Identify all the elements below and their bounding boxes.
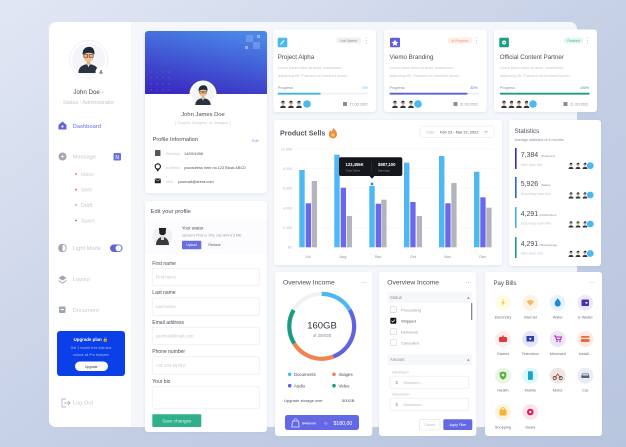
avatar upload block: Your avatar: [182, 226, 204, 230]
form: bio: [152, 379, 259, 409]
nav: document: Document: [73, 308, 99, 314]
bill icon grid: Car: [582, 388, 589, 393]
birthday row: Birthday: [166, 152, 180, 156]
nav: light mode toggle: Light Mode: [73, 246, 101, 252]
minimum input: Minimum: [392, 370, 409, 374]
message submenu: Inbox: [81, 172, 94, 178]
edit link: Edit: [252, 139, 259, 143]
filter more menu: ···: [466, 280, 472, 286]
bill icon grid: Games: [497, 351, 509, 356]
upgrade storage line: 500GB: [342, 398, 355, 403]
bill icon grid: Shopping: [495, 424, 511, 429]
y axis labels: 2,000: [283, 226, 292, 230]
bill icon grid: Deals: [525, 424, 535, 429]
donut legend: Documents: [294, 372, 316, 377]
stat: sales: Secondary team five: [521, 192, 551, 196]
form: email address: [152, 320, 259, 345]
bar chart: [299, 155, 492, 247]
project card: Official Content Partner: 21 Oct 2022: [570, 102, 588, 106]
icon: flame: [329, 128, 337, 138]
nav: light mode toggle: [59, 244, 122, 252]
stat: distribution: [515, 207, 594, 228]
bill icon grid: Motor: [553, 388, 563, 393]
project card: Project Alpha: Progress: [278, 86, 293, 90]
user avatar: [70, 40, 108, 78]
stat: sharewings: (Sharewings): [540, 243, 557, 247]
address row: youradress here no.123 Block ABCD: [184, 166, 246, 170]
nav: layout: [58, 276, 90, 283]
stat: products: (Products): [541, 154, 555, 158]
stat: sharewings: 4,291: [521, 241, 538, 248]
panel: edit profile: [145, 201, 267, 432]
project card: Official Content Partner: Finished: [567, 39, 580, 43]
form: phone number: +01 234 5678 0: [156, 363, 186, 368]
form: first name: [152, 261, 259, 286]
apply filter button: [443, 419, 472, 430]
status header: Status: [390, 295, 402, 300]
mail row: yourmail@dress.com: [178, 180, 214, 184]
form: phone number: Phone number: [152, 349, 185, 355]
status checkboxes: [390, 303, 472, 346]
form: last name: [152, 290, 259, 315]
project card: Project Alpha: adipiscing elit. Praesent vel hendrerit ipsum...: [278, 74, 350, 78]
y axis labels: [281, 147, 292, 250]
bill icon grid: Water: [553, 314, 564, 320]
pay bills heading: Pay Bills: [494, 281, 517, 287]
donut legend: [288, 372, 353, 388]
profile banner: [145, 31, 267, 94]
form: bio: Your bio: [152, 379, 171, 385]
nav: message: N: [115, 155, 119, 161]
user name: John Doe ·: [73, 89, 104, 96]
stat: products: Main team five: [521, 163, 542, 167]
project card: Project Alpha: Project Alpha: [278, 54, 315, 61]
chart tooltip: Total Sales: [346, 169, 361, 173]
chart tooltip: [339, 157, 402, 186]
stat: sharewings: [515, 237, 594, 258]
bill icon grid: Install...: [579, 351, 592, 356]
x axis months: Nov: [444, 254, 451, 259]
bill icon grid: Television: [522, 351, 539, 356]
form: last name: Last name: [152, 290, 176, 296]
panel: sidebar: [49, 22, 131, 427]
nav: dashboard: Dashboard: [73, 124, 101, 130]
panel: overview income donut: [275, 272, 372, 436]
profile avatar: [190, 80, 216, 108]
amount header: [387, 354, 472, 365]
avatar upload block: Upload a PNG or JPG, size limit is 5 MB.: [182, 234, 242, 238]
bill icon grid: Health: [497, 388, 509, 393]
stat: sales: [515, 177, 594, 198]
project card: Project Alpha: 21 Oct 2022: [350, 102, 368, 106]
donut legend: Video: [338, 383, 350, 388]
panel: statistics: [509, 120, 601, 266]
avatar upload block: [145, 219, 267, 254]
stat: sales: (Sales): [541, 183, 551, 187]
upgrade plan card: Get 1 month free trial and: [71, 346, 111, 350]
mail row: [155, 178, 214, 184]
profile name: John James Doe: [181, 112, 225, 118]
overview heading: Overview Income: [283, 280, 335, 286]
project card: Viemo Branding: [384, 30, 487, 112]
donut value: [307, 320, 337, 338]
status checkboxes: Processing: [401, 307, 421, 312]
y axis labels: 10,000: [281, 147, 292, 151]
nav: log out: Log Out: [73, 400, 94, 406]
bill icon grid: Internet: [524, 314, 538, 320]
message submenu: [75, 172, 95, 224]
project card: Viemo Branding: 21 Oct 2022: [460, 102, 478, 106]
date picker: Date :: [426, 129, 436, 134]
chart tooltip: 123,455K: [346, 162, 364, 167]
form: first name: First name: [156, 274, 177, 280]
chart tooltip: $987,100: [378, 162, 396, 167]
profile role: [ Graphic Designer, UI Designer ]: [175, 121, 231, 125]
project card: Official Content Partner: [494, 30, 597, 112]
pay bills more menu: ···: [589, 280, 595, 286]
more menu: ···: [361, 280, 367, 286]
y axis labels: 8,000: [283, 167, 292, 171]
nav: message: [58, 152, 121, 161]
apply filter button: Apply Filter: [449, 423, 467, 427]
donut chart: [289, 294, 354, 359]
save button: Save changes: [162, 418, 192, 424]
project card: Project Alpha: Lorem ipsum dolor sit amet, consectetur: [278, 66, 342, 70]
form: phone number: [152, 349, 259, 374]
birthday row: [155, 150, 203, 156]
price button: $400,00: [302, 422, 316, 426]
stat: sharewings: Main team Odd: [521, 252, 543, 256]
upgrade plan card: Upgrade: [85, 365, 98, 369]
maximum input: $: [396, 402, 398, 407]
stat: distribution: Secondary team Mid: [521, 222, 551, 226]
message submenu: Sent: [81, 188, 92, 194]
status header: [387, 292, 472, 303]
stat: products: 7,384: [521, 152, 538, 159]
panel: product sells chart: [274, 120, 502, 265]
bill icon grid: Electricity: [495, 314, 511, 320]
edit profile heading: Edit your profile: [151, 209, 191, 215]
cancel button: [419, 419, 440, 430]
price button: [285, 415, 359, 430]
save button: [152, 414, 201, 427]
chart title: Product Sells: [280, 130, 325, 138]
minimum input: Minimum...: [404, 380, 423, 385]
project card: Project Alpha: [273, 30, 376, 112]
form: email address: yourmail@mail.com: [156, 333, 194, 338]
bill icon grid: Mobile: [525, 388, 536, 393]
stat: distribution: 4,291: [521, 211, 538, 218]
project card: Official Content Partner: 100%: [580, 86, 589, 90]
project card: Official Content Partner: adipiscing elit. Praesent vel hendrerit ipsum...: [500, 74, 572, 78]
x axis months: Aug: [340, 254, 346, 259]
x axis months: Jul: [306, 254, 311, 259]
message submenu: Draft: [81, 203, 93, 209]
maximum input: Maximum: [392, 392, 410, 396]
panel: pay bills: [485, 272, 602, 436]
y axis labels: 6,000: [283, 187, 292, 191]
avatar upload block: Upload: [186, 243, 197, 247]
donut legend: Audio: [294, 383, 306, 388]
donut legend: Images: [338, 372, 353, 377]
main window panel: [49, 22, 577, 427]
bill icon grid: [495, 295, 593, 429]
status checkboxes: Delivered: [401, 329, 418, 334]
address row: [155, 164, 246, 172]
stat: sales: 5,926: [521, 181, 538, 188]
form: email address: Email address: [152, 320, 184, 326]
y axis labels: 4,000: [283, 206, 292, 210]
panel: profile card: [145, 31, 267, 193]
address row: Address: [166, 166, 180, 170]
user status: Status : Administrator: [63, 100, 114, 106]
minimum input: [390, 370, 469, 388]
mail row: Mail: [166, 180, 173, 184]
bill icon grid: Merchant: [550, 351, 567, 356]
project card: Project Alpha: Not Started: [340, 39, 357, 43]
filter heading: Overview Income: [387, 280, 439, 286]
message submenu: Spam: [81, 218, 95, 224]
avatar upload block: Remove: [208, 243, 221, 247]
project card: Official Content Partner: Progress: [500, 86, 515, 90]
statistics heading: Statistics: [514, 128, 539, 135]
x axis months: Sep: [375, 254, 381, 259]
donut value: 160GB: [307, 320, 337, 332]
x axis months: Oct: [410, 254, 417, 259]
birthday row: 14/09/1998: [184, 152, 203, 156]
stat: products: [515, 148, 594, 169]
project card: Viemo Branding: 80%: [470, 86, 478, 90]
cancel button: Cancel: [424, 423, 435, 427]
statistics subtitle: Average statistics of 6 months: [514, 138, 564, 142]
minimum input: $: [396, 380, 398, 385]
project card: Official Content Partner: Official Content Partner: [500, 54, 564, 61]
x axis months: Dec: [479, 254, 486, 259]
nav: document: [59, 306, 99, 314]
project card: Viemo Branding: In Progress: [452, 39, 469, 43]
project card: Viemo Branding: Lorem ipsum dolor sit amet, consectetur: [390, 66, 454, 70]
upgrade plan card: unlock all Pro features: [73, 353, 109, 357]
project card: Viemo Branding: adipiscing elit. Praesent vel hendrerit ipsum...: [390, 74, 462, 78]
amount header: Amount: [390, 357, 405, 362]
project card: Project Alpha: 0%: [362, 86, 368, 90]
status checkboxes: Cancelled: [401, 340, 419, 345]
upgrade storage line: [284, 398, 355, 403]
nav: dashboard: [58, 122, 101, 130]
bill icon grid: E-Wallet: [578, 314, 593, 320]
upgrade storage line: Upgrade storage over: [284, 398, 323, 403]
upgrade plan card: [57, 331, 125, 376]
donut value: of 200GB: [313, 333, 331, 338]
upgrade plan card: Upgrade plan 🔒: [74, 337, 108, 342]
maximum input: Maximum...: [404, 402, 424, 407]
price button: to: [324, 422, 328, 426]
profile information heading: Profile Information: [153, 137, 198, 143]
form: first name: First name: [152, 261, 176, 267]
stat: distribution: (Distribution): [540, 213, 557, 217]
chart tooltip: Earnings: [378, 169, 390, 173]
status checkboxes: Shipped: [401, 318, 416, 323]
form: last name: Last name: [156, 304, 176, 309]
nav: log out: [62, 399, 94, 407]
date picker: [420, 126, 494, 138]
price button: $180,00: [334, 421, 352, 427]
y axis labels: $0: [288, 246, 292, 250]
x axis months: [306, 254, 486, 259]
date picker: Feb 23 - Mar 22, 2022: [440, 129, 478, 134]
project card: Viemo Branding: Viemo Branding: [390, 54, 434, 61]
project card: Viemo Branding: Progress: [390, 86, 405, 90]
project card: Official Content Partner: Lorem ipsum dolor sit amet, consectetur: [500, 66, 564, 70]
panel: overview filter: [379, 272, 476, 436]
nav: message: Message: [73, 154, 96, 160]
maximum input: [390, 392, 469, 410]
nav: layout: Layout: [73, 277, 90, 283]
